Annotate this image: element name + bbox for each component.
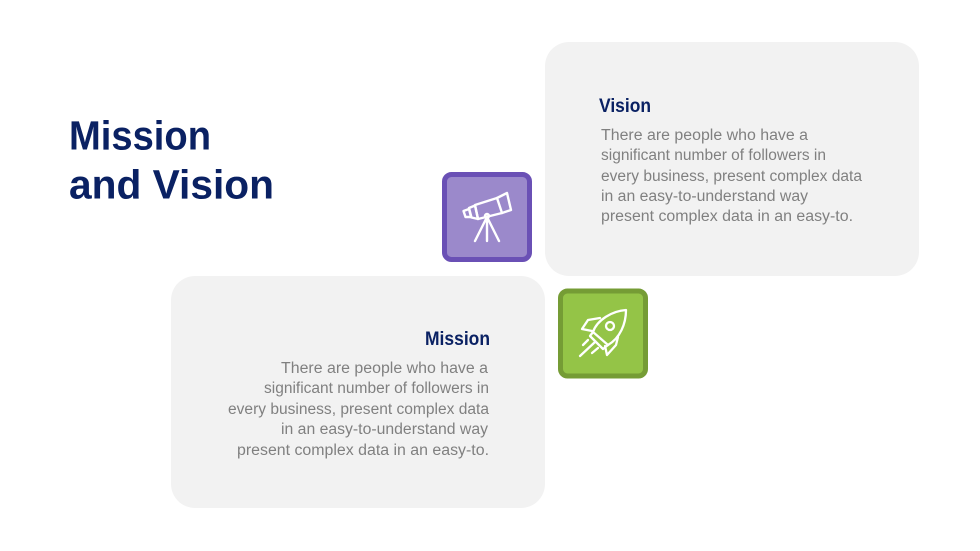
text block: mission description: present complex data in an easy-to. [237, 442, 489, 459]
heading: mission: Mission [425, 329, 490, 350]
panel: vision [545, 42, 919, 276]
panel: mission [171, 276, 545, 508]
text block: mission description: every business, present complex data [228, 401, 489, 418]
text block: vision description [601, 127, 862, 225]
icon: telescope [444, 174, 530, 260]
text block: vision description: There are people who have a [601, 127, 808, 144]
text block: mission description: in an easy-to-understand way [281, 421, 488, 438]
title: and Vision [69, 162, 274, 208]
text block: mission description: significant number of followers in [264, 380, 489, 397]
text block: vision description: every business, present complex data [601, 168, 862, 185]
icon: rocket [560, 291, 646, 376]
text block: mission description [228, 360, 489, 459]
title: Mission [69, 112, 211, 158]
text block: vision description: present complex data in an easy-to. [601, 208, 853, 225]
text block: mission description: There are people who have a [281, 360, 488, 377]
title [69, 112, 274, 208]
text block: vision description: in an easy-to-understand way [601, 188, 808, 205]
heading: vision: Vision [599, 96, 651, 117]
text block: vision description: significant number of followers in [601, 147, 826, 164]
